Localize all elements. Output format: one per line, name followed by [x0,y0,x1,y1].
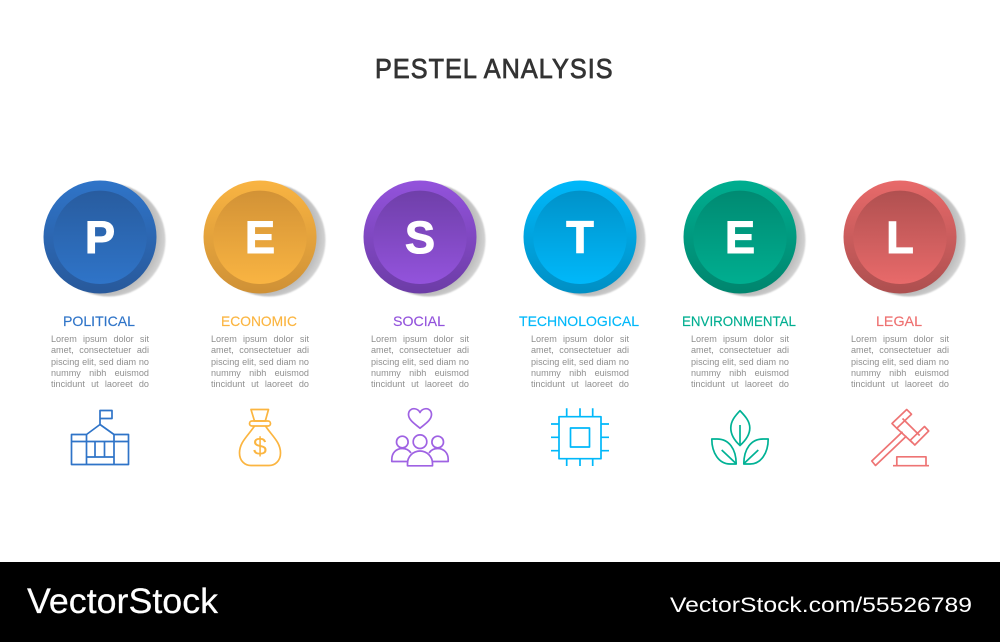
text block: nummy nibh euismod [51,368,149,378]
text block: Lorem ipsum dolor sit [531,334,629,344]
text block [211,334,309,389]
text block: piscing elit, sed diam no [851,356,949,366]
text block: amet, consectetuer adi [531,345,629,355]
panel: environmental [682,180,806,465]
circle badge E [204,180,326,298]
text block: tincidunt ut laoreet do [371,379,469,389]
text block [531,334,629,389]
circle badge E [684,180,806,298]
text block: tincidunt ut laoreet do [851,379,949,389]
circle badge P: P [85,212,115,263]
text block [51,334,149,389]
circle badge E: E [725,212,755,263]
footer image id: VectorStock.com/55526789 [670,593,972,617]
text block: nummy nibh euismod [371,368,469,378]
text block: tincidunt ut laoreet do [211,379,309,389]
text block: tincidunt ut laoreet do [691,379,789,389]
heading: legal: LEGAL [876,313,922,329]
panel: technological [519,180,646,466]
text block: Lorem ipsum dolor sit [211,334,309,344]
icon: government building [70,410,130,466]
text block: Lorem ipsum dolor sit [371,334,469,344]
icon: people with heart [390,408,450,467]
panel: political [44,180,166,466]
text block: piscing elit, sed diam no [211,356,309,366]
circle badge T: T [566,212,594,263]
panel: legal [844,180,966,466]
circle badge S: S [405,212,435,263]
icon: gavel [870,408,930,466]
text block: Lorem ipsum dolor sit [51,334,149,344]
text block [851,334,949,389]
text block: piscing elit, sed diam no [691,356,789,366]
text block: tincidunt ut laoreet do [531,379,629,389]
text block: amet, consectetuer adi [211,345,309,355]
circle badge S [364,180,486,298]
text block: piscing elit, sed diam no [51,356,149,366]
heading: political: POLITICAL [63,313,135,329]
heading: economic: ECONOMIC [221,313,297,329]
heading: social: SOCIAL [393,313,445,329]
icon: money bag [238,408,282,466]
text block: nummy nibh euismod [531,368,629,378]
text block: nummy nibh euismod [211,368,309,378]
text block: amet, consectetuer adi [691,345,789,355]
text block: amet, consectetuer adi [371,345,469,355]
text block: amet, consectetuer adi [51,345,149,355]
icon: money bag: $ [253,433,267,461]
text block: piscing elit, sed diam no [531,356,629,366]
text block: tincidunt ut laoreet do [51,379,149,389]
text block: Lorem ipsum dolor sit [851,334,949,344]
circle badge L: L [886,212,914,263]
text block: piscing elit, sed diam no [371,356,469,366]
footer bar [0,562,1000,642]
circle badge E: E [245,212,275,263]
heading: technological: TECHNOLOGICAL [519,313,639,329]
circle badge T [524,180,646,298]
panel: economic [204,180,326,466]
icon: leaves [710,410,770,465]
icon: microchip [551,408,609,466]
text block: amet, consectetuer adi [851,345,949,355]
footer logo: VectorStock [27,582,219,621]
text block [371,334,469,389]
text block [691,334,789,389]
title: PESTEL ANALYSIS [375,53,613,84]
panel: social [364,180,486,467]
text block: nummy nibh euismod [851,368,949,378]
text block: nummy nibh euismod [691,368,789,378]
text block: Lorem ipsum dolor sit [691,334,789,344]
circle badge L [844,180,966,298]
circle badge P [44,180,166,298]
heading: environmental: ENVIRONMENTAL [682,313,796,329]
